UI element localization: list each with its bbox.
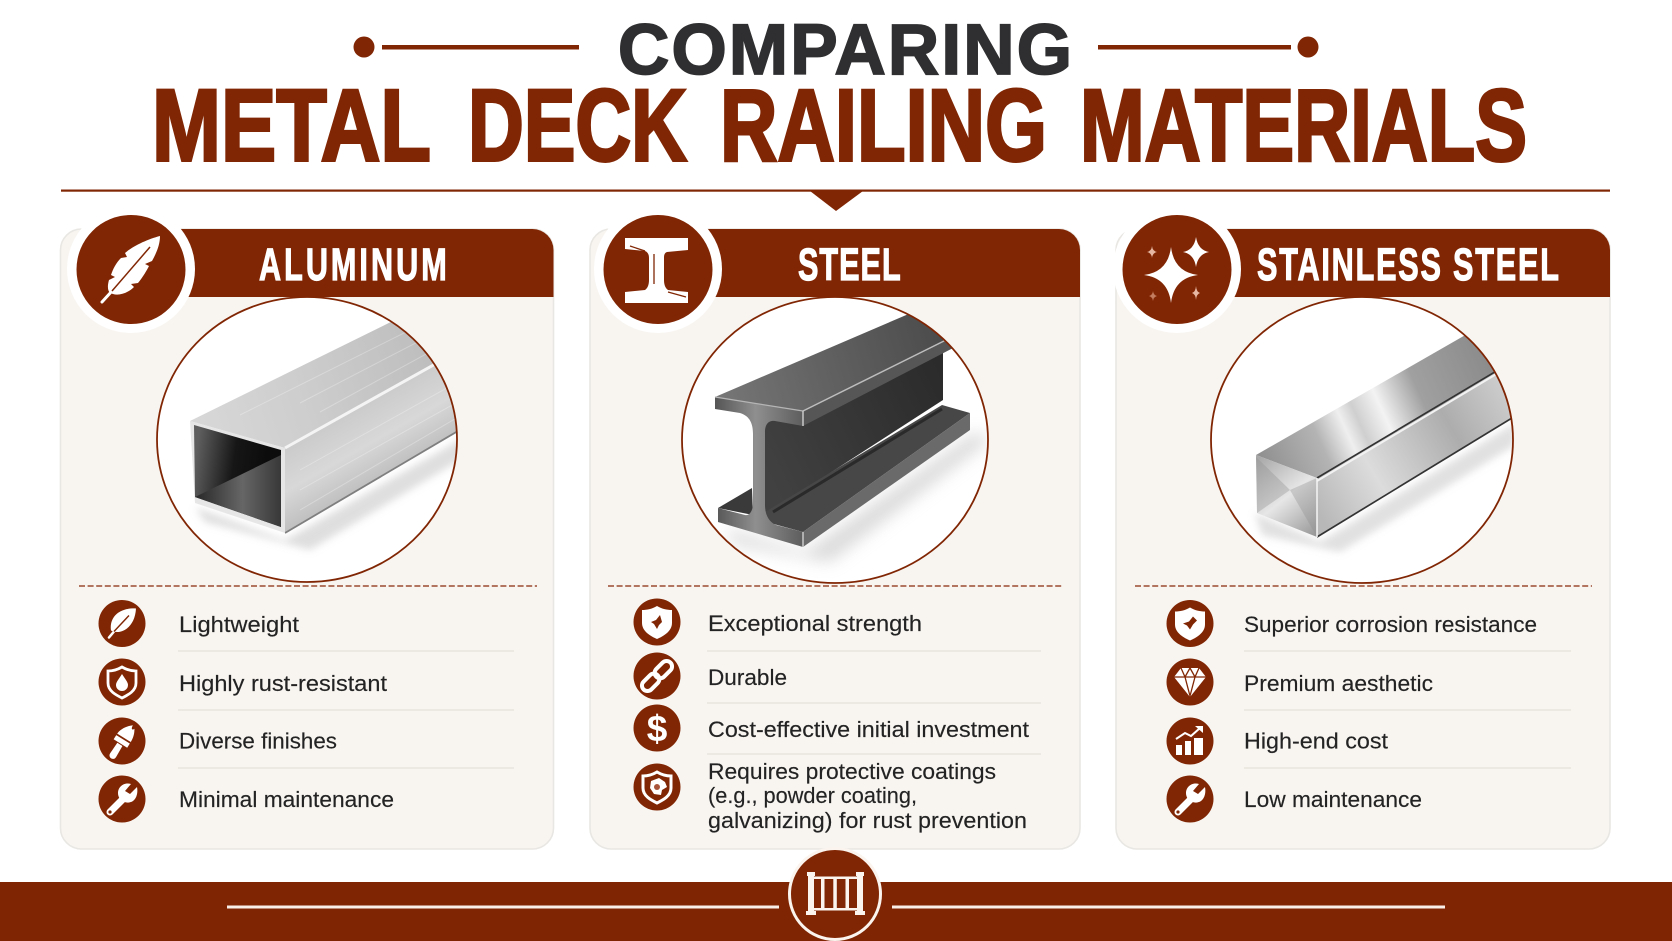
- icon: sparkles: [1113, 205, 1241, 333]
- feature: exceptional strength: Exceptional strength: [708, 611, 922, 636]
- panel: stainless steel: [1113, 205, 1610, 849]
- feature: superior corrosion resistance: [1166, 600, 1537, 647]
- feature: highly rust-resistant: [98, 658, 388, 706]
- feature: exceptional strength: [634, 598, 922, 646]
- icon: chain link: [634, 652, 680, 700]
- feature: diverse finishes: Diverse finishes: [179, 728, 337, 754]
- icon: i-beam: [594, 205, 722, 333]
- icon: shield: [1166, 600, 1214, 647]
- heading: metal deck railing materials: RAILING: [720, 68, 1047, 182]
- title ornament right: [1098, 36, 1318, 58]
- feature: premium aesthetic: Premium aesthetic: [1244, 671, 1433, 696]
- icon: railing: [790, 848, 880, 940]
- panel: aluminum: [60, 205, 554, 849]
- feature: protective coatings: (e.g., powder coating,: [708, 783, 917, 808]
- footer line left: [227, 906, 779, 908]
- photo: steel i-beam: [682, 292, 990, 583]
- feature: high-end cost: [1166, 718, 1389, 764]
- icon: shield with drop: [98, 658, 146, 706]
- feature: protective coatings: galvanizing) for rust prevention: [708, 808, 1027, 833]
- icon: diamond: [1166, 658, 1214, 706]
- feature: protective coatings: [634, 759, 1027, 833]
- divider: [608, 585, 1062, 587]
- icon: shield: [634, 598, 680, 646]
- footer line right: [892, 906, 1445, 908]
- feature: minimal maintenance: [98, 776, 394, 822]
- icon: leaf: [98, 600, 146, 647]
- heading: metal deck railing materials: [152, 68, 1527, 182]
- icon: wrench: [98, 776, 146, 822]
- feature: highly rust-resistant: Highly rust-resistant: [179, 671, 388, 696]
- header bar: steel: [658, 229, 1080, 297]
- feature: lightweight: Lightweight: [179, 612, 300, 637]
- feature: lightweight: [98, 600, 300, 647]
- heading: metal deck railing materials: MATERIALS: [1080, 68, 1527, 182]
- header bar: aluminum: [131, 229, 554, 297]
- title: [152, 11, 1527, 182]
- heading: metal deck railing materials: DECK: [468, 68, 687, 182]
- icon: wrench: [1166, 776, 1214, 822]
- heading: comparing: COMPARING: [618, 11, 1072, 90]
- feature: diverse finishes: [90, 709, 337, 773]
- feature: premium aesthetic: [1166, 658, 1433, 706]
- icon: rising chart: [1166, 718, 1214, 764]
- feature: low maintenance: Low maintenance: [1244, 787, 1422, 812]
- feature: cost-effective: Cost-effective initial investment: [708, 717, 1030, 742]
- title ornament left: [354, 36, 579, 58]
- icon: paint brush: [90, 709, 154, 773]
- divider: [79, 585, 537, 587]
- feature: minimal maintenance: Minimal maintenance: [179, 787, 394, 812]
- feature: protective coatings: Requires protective coatings: [708, 759, 996, 784]
- title: aluminum: ALUMINUM: [259, 240, 447, 291]
- icon: feather: [67, 205, 195, 333]
- icon: dollar: $: [647, 708, 668, 749]
- icon: coated shield: [634, 764, 680, 810]
- divider: [1135, 585, 1592, 587]
- panel: steel: [590, 205, 1080, 849]
- feature: high-end cost: High-end cost: [1244, 728, 1389, 754]
- photo: aluminum tube: [156, 297, 458, 583]
- header bar: stainless steel: [1177, 229, 1610, 297]
- feature: durable: Durable: [708, 665, 787, 690]
- feature: cost-effective: [634, 704, 1030, 752]
- photo: stainless steel bar: [1211, 297, 1530, 583]
- title: stainless steel: STAINLESS STEEL: [1257, 240, 1559, 291]
- feature: superior corrosion resistance: Superior corrosion resistance: [1244, 612, 1537, 637]
- header rule with pointer: [61, 190, 1610, 211]
- feature: durable: [634, 652, 787, 700]
- footer band: [0, 848, 1672, 941]
- heading: metal deck railing materials: METAL: [152, 68, 431, 182]
- icon: dollar: [634, 704, 680, 752]
- feature: low maintenance: [1166, 776, 1422, 822]
- title: steel: STEEL: [798, 240, 901, 291]
